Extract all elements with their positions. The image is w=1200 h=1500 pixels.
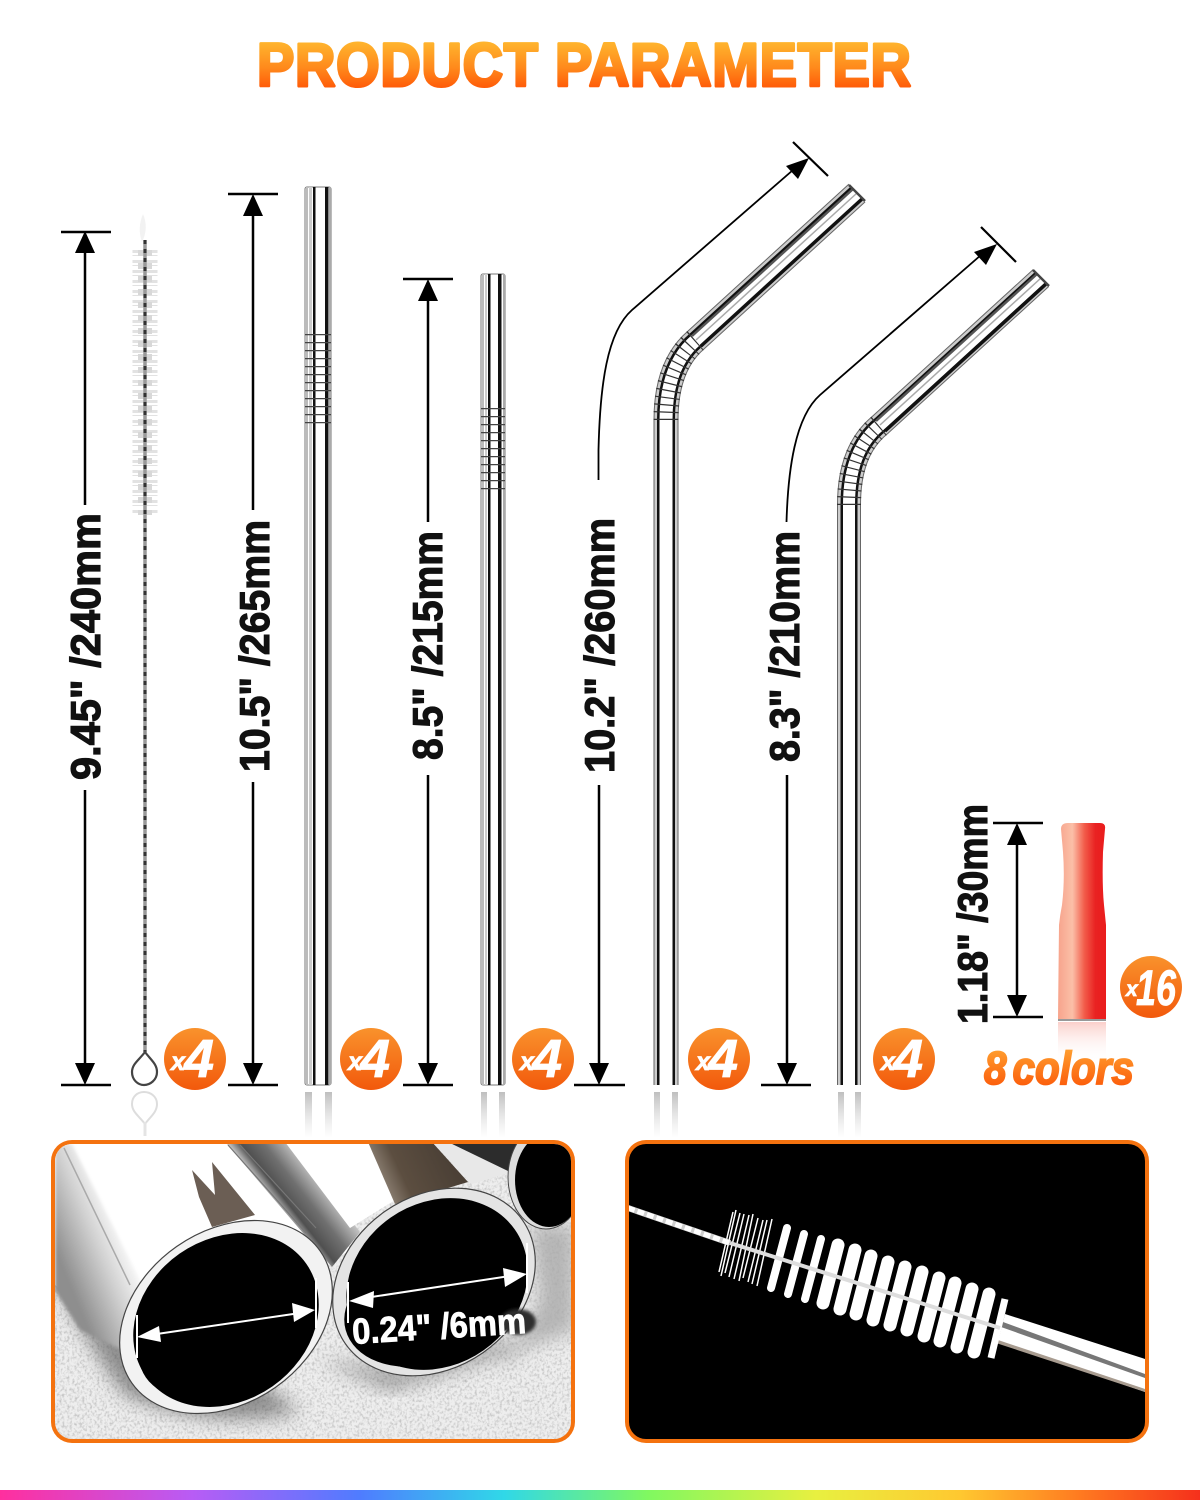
straw opening: centre xyxy=(332,1188,538,1376)
straw in brush photo xyxy=(996,1314,1145,1392)
label: inner diameter: 0.24" /6mm xyxy=(351,1300,527,1352)
dimension: short bent straw: 8.3" /210mm xyxy=(761,531,808,762)
badge x4 brush xyxy=(164,1028,226,1090)
dimension: brush length: 9.45" /240mm xyxy=(62,513,109,780)
badge x4 short bent: x xyxy=(879,1048,896,1076)
badge x4 brush: 4 xyxy=(183,1029,214,1089)
badge x4 short bent: 4 xyxy=(892,1029,923,1089)
dimension: long straight straw: 10.5" /265mm xyxy=(231,520,278,772)
badge x16: x xyxy=(1125,978,1139,1001)
long bent straw xyxy=(654,185,865,1138)
badge x4 long bent: 4 xyxy=(707,1029,738,1089)
badge x4 long straight xyxy=(340,1028,402,1090)
panel: straw opening photo xyxy=(51,1125,584,1453)
badge x16 xyxy=(1120,956,1182,1018)
badge x4 short straight: 4 xyxy=(531,1029,562,1089)
badge x4 long straight: 4 xyxy=(359,1029,390,1089)
short bent straw xyxy=(838,270,1049,1138)
dimension: silicone tip: 1.18" /30mm xyxy=(949,804,996,1024)
panel: brush close-up photo xyxy=(625,1140,1149,1443)
badge x4 short straight: x xyxy=(518,1048,535,1076)
title: PRODUCT PARAMETER xyxy=(257,32,911,100)
silicone tip xyxy=(1058,823,1106,1062)
badge x4 long bent xyxy=(688,1028,750,1090)
badge x4 short bent xyxy=(873,1028,935,1090)
dimension: short bent straw xyxy=(761,227,1016,1085)
arrow: left diameter xyxy=(137,1278,316,1358)
rainbow footer bar xyxy=(0,1490,1200,1500)
badge x4 long straight: x xyxy=(346,1048,363,1076)
dimension: long bent straw: 10.2" /260mm xyxy=(576,518,623,773)
bristles xyxy=(719,1210,1005,1358)
dimension: long bent straw xyxy=(574,142,828,1085)
label: 8 colors: 8 colors xyxy=(984,1042,1134,1094)
badge x4 brush: x xyxy=(169,1048,186,1076)
twisted wire xyxy=(628,1208,1000,1328)
straw opening: back right xyxy=(508,1144,571,1230)
short straight straw xyxy=(481,274,505,1138)
badge x16: 16 xyxy=(1136,960,1177,1016)
badge x4 long bent: x xyxy=(694,1048,711,1076)
dimension: short straight straw xyxy=(403,279,453,1085)
dimension: brush length xyxy=(61,231,111,1085)
long straight straw xyxy=(305,187,332,1138)
badge x4 short straight xyxy=(512,1028,574,1090)
dimension: silicone tip xyxy=(949,804,1043,1024)
cleaning brush xyxy=(132,214,157,1136)
dimension: short straight straw: 8.5" /215mm xyxy=(404,531,451,760)
dimension: long straight straw xyxy=(228,194,278,1085)
straw opening: left xyxy=(119,1220,333,1414)
arrow: right diameter xyxy=(348,1243,527,1323)
